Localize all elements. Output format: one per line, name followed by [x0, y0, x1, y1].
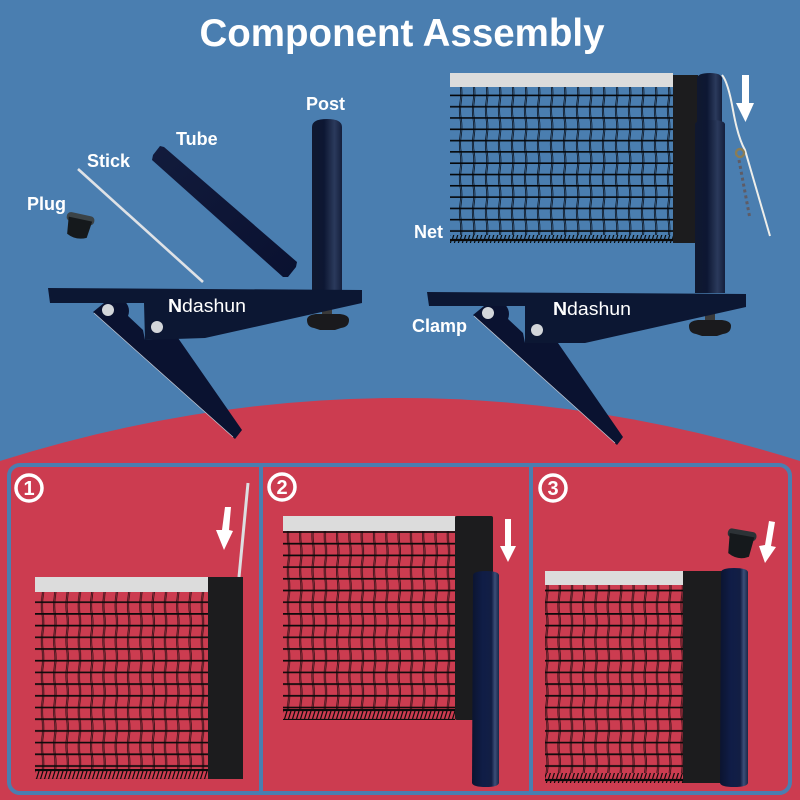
title: Component Assembly	[199, 12, 605, 55]
panel: step 1	[16, 475, 248, 779]
plug	[63, 211, 95, 241]
step number 1	[16, 475, 42, 501]
outer post	[695, 120, 725, 293]
post	[312, 119, 342, 291]
red dome background	[0, 398, 800, 800]
knob	[689, 313, 731, 336]
label: Net: Net	[414, 222, 443, 242]
label: Post: Post	[306, 94, 345, 114]
net	[283, 516, 493, 720]
plug	[724, 528, 757, 560]
step number 3: 3	[547, 478, 559, 500]
label: Tube: Tube	[176, 129, 218, 149]
screw	[531, 324, 543, 336]
rope	[722, 75, 770, 236]
brand: Ndashun	[553, 299, 631, 319]
screw	[151, 321, 163, 333]
step number 1: 1	[23, 478, 35, 500]
arrow	[500, 519, 516, 562]
diagram: assembled	[412, 73, 770, 445]
panel: step 3	[540, 475, 776, 787]
label: Plug: Plug	[27, 194, 66, 214]
knob	[307, 308, 349, 330]
net	[545, 571, 723, 783]
diagram: separated components	[27, 94, 362, 439]
tube	[472, 571, 499, 787]
label: Stick: Stick	[87, 151, 131, 171]
tube	[720, 568, 748, 787]
brand: Ndashun	[168, 296, 246, 316]
bead chain	[736, 149, 750, 219]
arrow	[759, 521, 776, 563]
inner post	[697, 73, 722, 122]
arrow	[736, 75, 754, 122]
screw	[102, 304, 114, 316]
stick	[239, 483, 248, 577]
arrow	[216, 507, 233, 550]
label: Clamp: Clamp	[412, 316, 467, 336]
panel: step 2	[269, 474, 516, 787]
tube	[152, 146, 297, 277]
screw	[482, 307, 494, 319]
net	[35, 577, 243, 779]
net	[450, 73, 698, 243]
stick	[78, 169, 203, 282]
step number 2	[269, 474, 295, 500]
step number 2: 2	[276, 477, 288, 499]
clamp	[427, 292, 746, 445]
panel frame	[9, 465, 790, 793]
clamp	[48, 288, 362, 439]
step number 3	[540, 475, 566, 501]
